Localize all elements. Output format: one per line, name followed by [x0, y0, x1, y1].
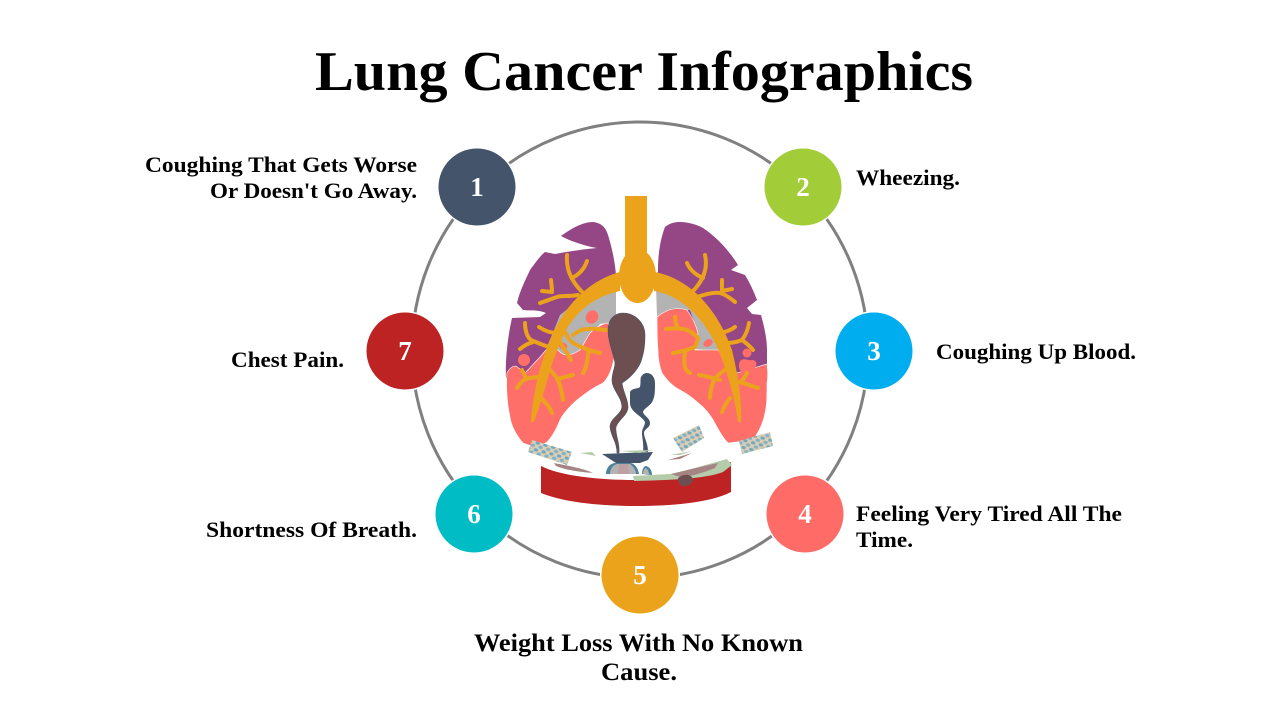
step 6: 6 — [467, 499, 481, 529]
right lung: gray middle lobe — [656, 286, 720, 351]
step 1 — [437, 147, 517, 227]
central lung illustration — [506, 196, 773, 506]
smoke: brown plume — [608, 313, 645, 453]
step 5 label — [474, 630, 803, 686]
tumour spots — [518, 308, 756, 375]
cigarette filter: left — [528, 440, 572, 465]
title: Lung Cancer Infographics — [315, 41, 973, 103]
step 5 label: Cause. — [601, 659, 677, 686]
left lung: coral lower lobe — [507, 323, 614, 448]
step 2 label: Wheezing. — [856, 165, 960, 190]
step 4: 4 — [798, 499, 812, 529]
cigarette filter: right — [739, 432, 773, 454]
left lung: gray middle lobe — [548, 286, 616, 358]
step 3 label: Coughing Up Blood. — [936, 339, 1136, 364]
airway: trachea and main arches — [531, 196, 741, 422]
smoke: navy plume — [630, 373, 655, 452]
step 6 label: Shortness Of Breath. — [206, 517, 417, 542]
step 7: 7 — [398, 336, 412, 366]
right lung: coral lower lobe — [657, 309, 768, 443]
step 3 — [834, 311, 914, 391]
step 5 — [600, 535, 680, 615]
step 4 — [765, 474, 845, 554]
step 3: 3 — [867, 336, 881, 366]
step 2 — [763, 147, 843, 227]
cigarette filter: centre — [673, 425, 704, 452]
step 1 label — [145, 152, 417, 203]
step 4 label: Time. — [856, 527, 913, 552]
ring connecting the numbered steps — [412, 122, 868, 578]
left lung: purple upper lobe — [506, 222, 616, 382]
airway branches, right — [666, 255, 758, 412]
right lung: purple upper lobe — [657, 222, 767, 385]
step 5 label: Weight Loss With No Known — [474, 630, 803, 657]
step 7 label: Chest Pain. — [231, 347, 344, 372]
white cut-outs around trachea — [616, 285, 656, 345]
step 5: 5 — [633, 560, 647, 590]
step 1 label: Coughing That Gets Worse — [145, 152, 417, 177]
step 4 label — [856, 501, 1122, 552]
step 2: 2 — [796, 172, 810, 202]
step 1 label: Or Doesn't Go Away. — [210, 178, 417, 203]
step 7 — [365, 311, 445, 391]
airway branches, left — [517, 255, 607, 413]
ashtray: rim and contents — [554, 450, 732, 486]
step 1: 1 — [470, 172, 484, 202]
ashtray: red base — [541, 462, 731, 506]
step 6 — [434, 474, 514, 554]
step 4 label: Feeling Very Tired All The — [856, 501, 1122, 526]
